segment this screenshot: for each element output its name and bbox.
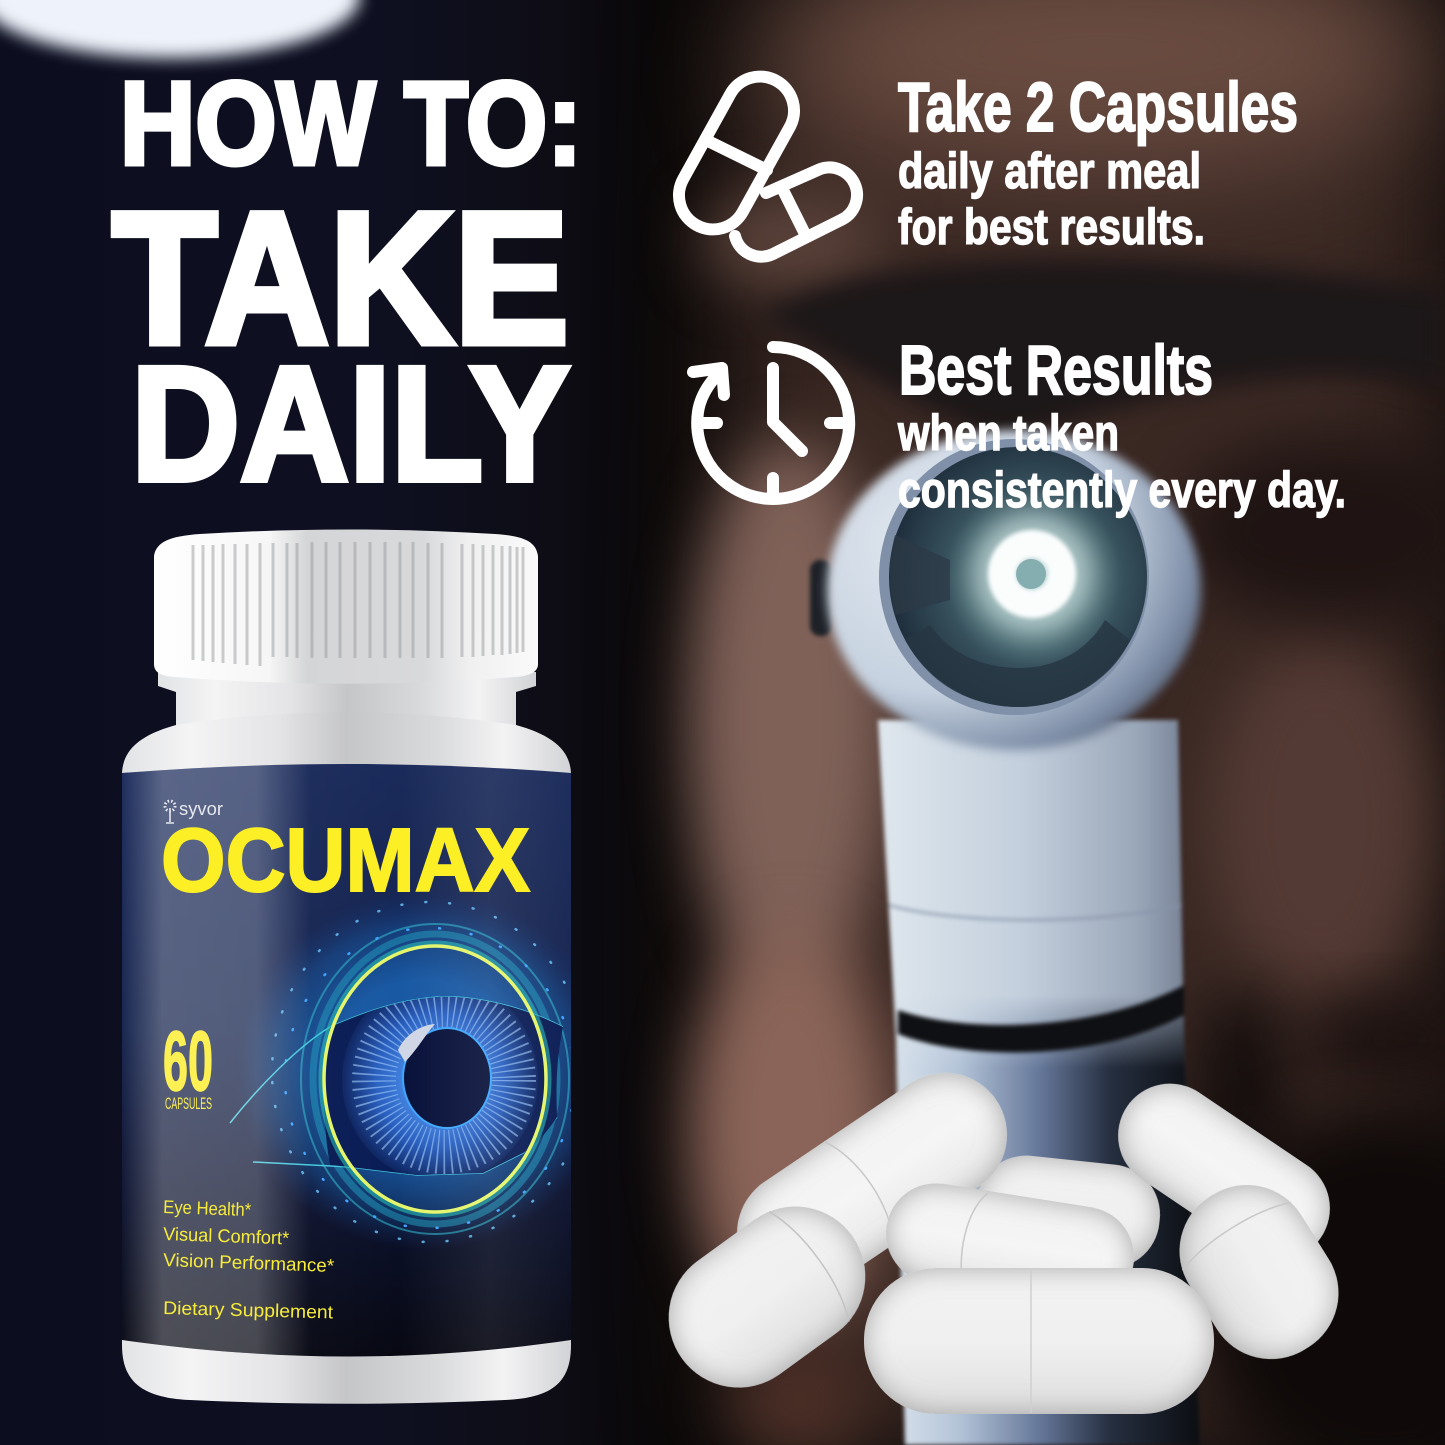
heading: how to take daily bbox=[112, 58, 582, 515]
brand logo bbox=[165, 799, 223, 823]
capsule: long upper left bbox=[713, 1049, 1031, 1319]
step 1 line 1: daily after meal bbox=[898, 143, 1201, 199]
capsule: centre bbox=[879, 1176, 1141, 1314]
heading line 2: TAKE bbox=[112, 173, 569, 383]
benefits list bbox=[163, 1196, 334, 1322]
product name: OCUMAX bbox=[161, 811, 530, 911]
ring glow bbox=[322, 944, 548, 1214]
logo tree mark bbox=[165, 801, 175, 823]
capsules pile bbox=[641, 1049, 1363, 1415]
logo wordmark: syvor bbox=[179, 799, 223, 819]
iris bbox=[342, 996, 538, 1175]
yellow ring bbox=[324, 946, 546, 1212]
outer tech rings bbox=[272, 902, 588, 1242]
lens center bbox=[1016, 559, 1046, 589]
icon: two capsules bbox=[667, 64, 857, 257]
dietary supplement: Dietary Supplement bbox=[163, 1297, 333, 1322]
capsule count bbox=[163, 1014, 213, 1113]
supplement bottle bbox=[122, 530, 615, 1404]
device handle bbox=[878, 720, 1200, 1445]
eye graphic bbox=[230, 900, 571, 1244]
capsule: front bbox=[864, 1268, 1214, 1414]
step 1 line 2: for best results. bbox=[898, 199, 1205, 255]
eye halo bbox=[248, 901, 571, 1244]
icon: clock with arrow bbox=[693, 347, 849, 499]
benefit 3: Vision Performance* bbox=[163, 1249, 334, 1276]
step 2 line 1: when taken bbox=[897, 405, 1119, 461]
capsule: lower right bbox=[1155, 1161, 1363, 1383]
capsule: back centre bbox=[971, 1151, 1165, 1273]
lens rim bbox=[879, 439, 1149, 715]
heading line 3: DAILY bbox=[131, 332, 570, 515]
count unit: CAPSULES bbox=[165, 1094, 212, 1113]
eye lid lines bbox=[230, 997, 563, 1175]
capsule: upper right bbox=[1098, 1063, 1350, 1281]
lens light ring bbox=[1002, 544, 1062, 604]
bottle cap bbox=[154, 530, 538, 684]
lens lower ring detail bbox=[905, 620, 1130, 707]
benefit 1: Eye Health* bbox=[163, 1196, 252, 1220]
step 2 line 2: consistently every day. bbox=[898, 462, 1346, 518]
step 1 heading: Take 2 Capsules bbox=[898, 68, 1298, 146]
bottle neck bbox=[158, 672, 536, 735]
device button bbox=[810, 560, 832, 636]
heading line 1: HOW TO: bbox=[120, 58, 582, 190]
step 2 text bbox=[897, 331, 1346, 518]
capsule: left bbox=[641, 1179, 893, 1415]
iris rays bbox=[374, 1008, 514, 1152]
lens light glow bbox=[973, 513, 1093, 633]
step 2 heading: Best Results bbox=[899, 331, 1213, 409]
eye highlight bbox=[398, 1024, 435, 1062]
lens bbox=[889, 447, 1147, 707]
otoscope device bbox=[810, 430, 1201, 1445]
device head bbox=[827, 430, 1201, 750]
cap ribs bbox=[193, 542, 523, 666]
benefit 2: Visual Comfort* bbox=[163, 1223, 290, 1248]
overhead light glow bbox=[0, 0, 360, 58]
label glare bbox=[122, 764, 571, 1356]
eye inside lid bbox=[324, 996, 563, 1175]
lens left detail bbox=[890, 535, 950, 615]
step 1 text bbox=[898, 68, 1298, 255]
bottle label bbox=[122, 764, 571, 1356]
bottle body bbox=[122, 712, 571, 1404]
count number: 60 bbox=[163, 1014, 213, 1108]
pupil bbox=[403, 1028, 491, 1128]
